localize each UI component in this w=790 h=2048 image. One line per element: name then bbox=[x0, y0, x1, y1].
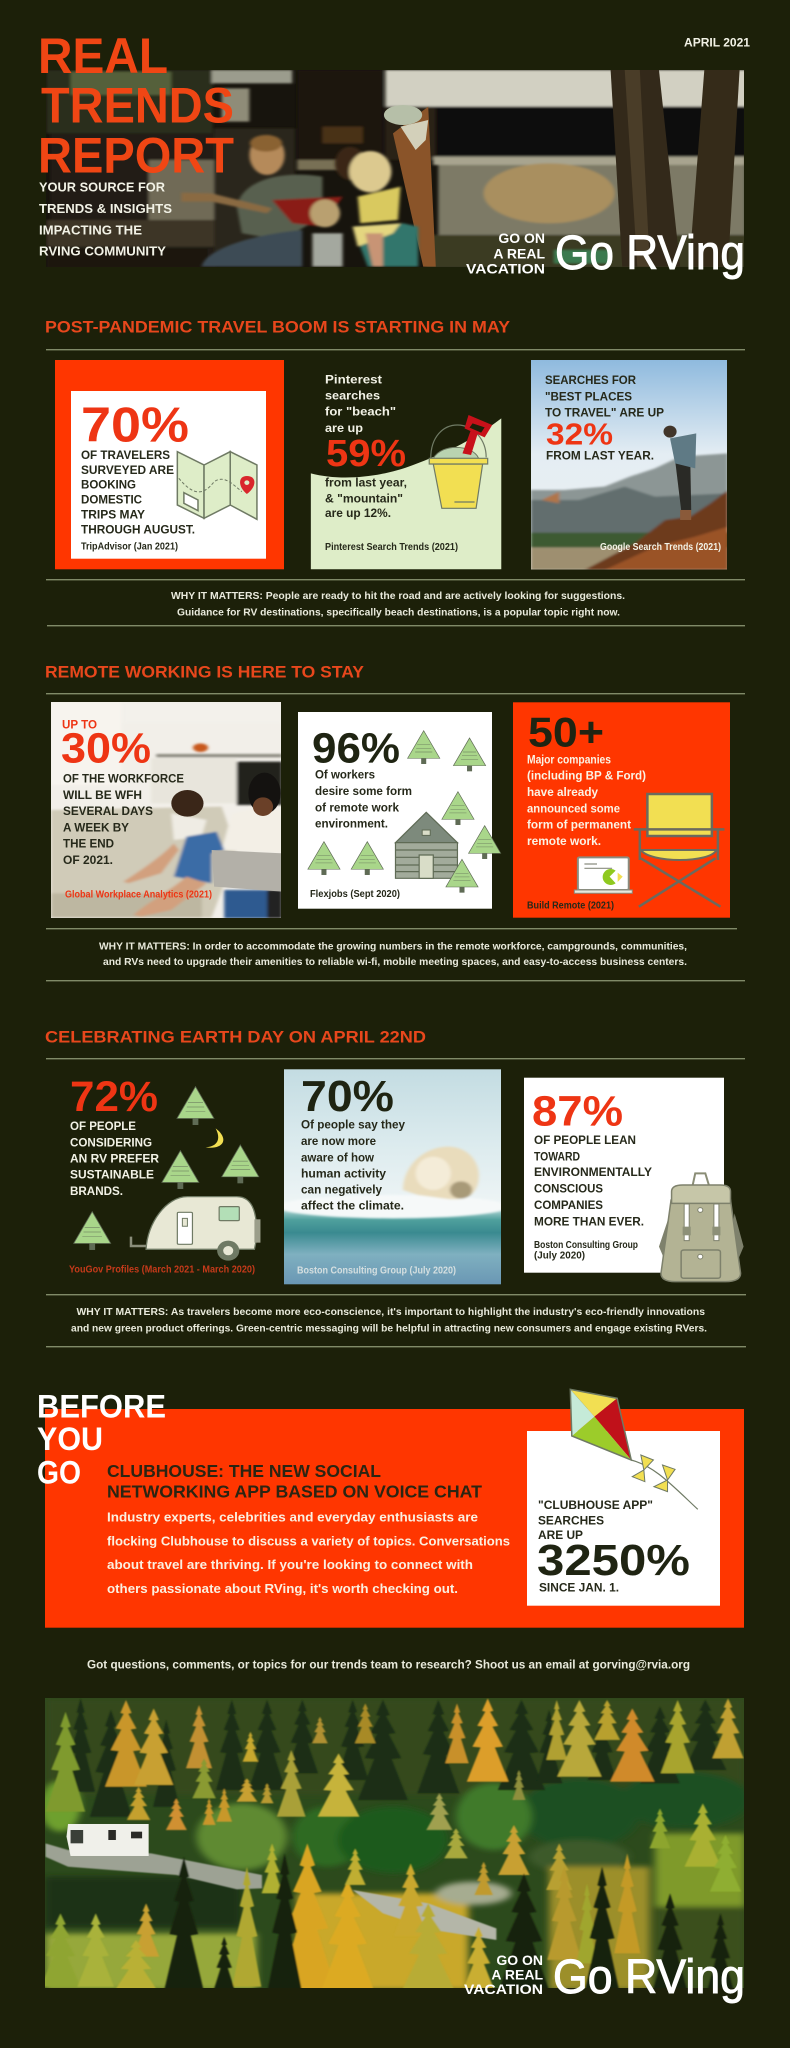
text: people lean toward: CONSCIOUS bbox=[534, 1182, 603, 1196]
text: Pinterest searches: are up bbox=[325, 421, 363, 435]
text: since jan 1: SINCE JAN. 1. bbox=[539, 1581, 619, 1595]
text: major companies: announced some bbox=[527, 801, 620, 815]
stat: 32%: 32% bbox=[546, 416, 613, 451]
text: people considering: SUSTAINABLE bbox=[70, 1168, 154, 1182]
why it matters: travel bbox=[171, 591, 625, 618]
photo: hiker on mountain bbox=[531, 426, 732, 570]
text: travelers surveyed: DOMESTIC bbox=[81, 493, 142, 507]
text: of workers: desire some form bbox=[315, 784, 412, 798]
text: best places: "BEST PLACES bbox=[545, 389, 632, 403]
text: Pinterest searches bbox=[325, 372, 396, 435]
stat: 96%: 96% bbox=[312, 724, 400, 772]
text: Pinterest searches: Pinterest bbox=[325, 372, 382, 386]
heading: before you go: YOU bbox=[37, 1421, 103, 1457]
text: best places: SEARCHES FOR bbox=[545, 373, 636, 387]
logo: Go RVing footer: GO ON bbox=[496, 1952, 543, 1968]
source: Boston Consulting Group: Boston Consulting Group (July 2020) bbox=[297, 1265, 456, 1276]
icon: trailer, trees and moon bbox=[74, 1087, 260, 1261]
stat: 59%: 59% bbox=[326, 433, 406, 475]
text: major companies: form of permanent bbox=[527, 818, 631, 832]
text: people considering: AN RV PREFER bbox=[70, 1152, 159, 1166]
text: clubhouse app searches: "CLUBHOUSE APP" bbox=[538, 1498, 653, 1512]
why it matters: travel: WHY IT MATTERS: People are ready to hit the road and are actively looking for suggestions. bbox=[171, 591, 625, 602]
icon: cabin and trees bbox=[308, 731, 501, 893]
title bbox=[38, 28, 234, 183]
source: YouGov: YouGov Profiles (March 2021 - March 2020) bbox=[69, 1265, 255, 1276]
text: people lean toward: MORE THAN EVER. bbox=[534, 1214, 644, 1228]
header photo: family at RV bbox=[46, 70, 748, 268]
text: from last year bbox=[325, 476, 407, 520]
text: people considering: CONSIDERING bbox=[70, 1135, 152, 1149]
text: people lean toward: ENVIRONMENTALLY bbox=[534, 1165, 652, 1179]
stat: 70%: 70% bbox=[301, 1072, 394, 1121]
photo: RV crossing bridge in autumn forest bbox=[40, 1698, 751, 1990]
why it matters: eco: WHY IT MATTERS: As travelers become more eco-conscience, it's important to highlight the industry's eco-friendly innovations bbox=[76, 1307, 705, 1318]
text: major companies: (including BP & Ford) bbox=[527, 769, 646, 783]
heading: clubhouse: CLUBHOUSE: THE NEW SOCIAL bbox=[107, 1461, 381, 1481]
heading: before you go: GO bbox=[37, 1454, 81, 1490]
panel: 96% workers bbox=[298, 712, 501, 909]
text: aware of human activity: human activity bbox=[301, 1166, 386, 1180]
text: aware of human activity: aware of how bbox=[301, 1150, 374, 1164]
text: clubhouse app searches bbox=[538, 1498, 653, 1542]
panel: Pinterest searches bbox=[311, 372, 501, 569]
why it matters: eco bbox=[71, 1307, 707, 1334]
text: major companies: remote work. bbox=[527, 834, 601, 848]
subtitle: IMPACTING THE bbox=[39, 223, 142, 237]
icon: map bbox=[177, 452, 257, 519]
text: travelers surveyed: BOOKING bbox=[81, 478, 136, 492]
source: Flexjobs: Flexjobs (Sept 2020) bbox=[310, 889, 400, 900]
logo: Go RVing header: A REAL bbox=[493, 245, 545, 261]
why it matters: travel: Guidance for RV destinations, specifically beach destinations, is a popular topic right now. bbox=[177, 607, 620, 618]
text: from last year: & "mountain" bbox=[325, 491, 403, 505]
text: clubhouse body bbox=[107, 1510, 510, 1596]
text: people considering bbox=[70, 1119, 159, 1198]
icon: kite bbox=[570, 1389, 698, 1509]
text: travelers surveyed: OF TRAVELERS bbox=[81, 448, 170, 462]
text: travelers surveyed: THROUGH AUGUST. bbox=[81, 522, 195, 536]
footer contact line: Got questions, comments, or topics for our trends team to research? Shoot us an email at gorving@rvia.org bbox=[87, 1659, 690, 1671]
source: Boston Consulting Group: Boston Consulting Group bbox=[534, 1240, 638, 1251]
source: TripAdvisor: TripAdvisor (Jan 2021) bbox=[81, 541, 178, 552]
text: of the workforce: OF THE WORKFORCE bbox=[63, 772, 184, 786]
title: REPORT bbox=[38, 127, 234, 183]
logo: Go RVing header: VACATION bbox=[466, 260, 545, 276]
subtitle: TRENDS & INSIGHTS bbox=[39, 202, 172, 216]
icon: camp chair and laptop bbox=[574, 794, 724, 907]
title: TRENDS bbox=[41, 78, 234, 134]
heading: clubhouse: NETWORKING APP BASED ON VOICE CHAT bbox=[107, 1482, 482, 1502]
text: of the workforce: OF 2021. bbox=[63, 853, 113, 867]
text: clubhouse body: flocking Clubhouse to discuss a variety of topics. Conversations bbox=[107, 1533, 510, 1548]
text: people lean toward bbox=[534, 1133, 652, 1228]
text: best places bbox=[545, 373, 664, 420]
logo: Go RVing footer bbox=[464, 1951, 745, 2004]
text: Pinterest searches: for "beach" bbox=[325, 404, 396, 418]
text: major companies: have already bbox=[527, 785, 598, 799]
text: Pinterest searches: searches bbox=[325, 388, 380, 402]
text: travelers surveyed bbox=[81, 448, 195, 536]
stat: 3250%: 3250% bbox=[537, 1536, 690, 1585]
source: Google: Google Search Trends (2021) bbox=[600, 542, 721, 553]
card: 3250% searches bbox=[527, 1431, 720, 1606]
title: REAL bbox=[38, 28, 168, 84]
panel: 30% work from home photo bbox=[51, 702, 282, 918]
text: travelers surveyed: TRIPS MAY bbox=[81, 507, 145, 521]
logo: Go RVing footer: A REAL bbox=[491, 1966, 543, 1982]
text: major companies: Major companies bbox=[527, 752, 611, 766]
text: people lean toward: OF PEOPLE LEAN bbox=[534, 1133, 636, 1147]
logo: Go RVing header bbox=[466, 227, 745, 280]
panel: 72% sustainable brands bbox=[69, 1073, 260, 1276]
text: of workers: environment. bbox=[315, 817, 388, 831]
text: from last year: FROM LAST YEAR. bbox=[546, 448, 654, 462]
stat: 30%: 30% bbox=[61, 724, 151, 772]
source: Pinterest: Pinterest Search Trends (2021) bbox=[325, 542, 458, 553]
text: travelers surveyed: SURVEYED ARE bbox=[81, 463, 174, 477]
text: of workers bbox=[315, 767, 412, 831]
text: clubhouse body: about travel are thriving. If you're looking to connect with bbox=[107, 1557, 473, 1572]
text: clubhouse app searches: ARE UP bbox=[538, 1528, 583, 1542]
text: people lean toward: COMPANIES bbox=[534, 1198, 603, 1212]
text: of the workforce: THE END bbox=[63, 837, 114, 851]
stat: 87%: 87% bbox=[532, 1088, 623, 1136]
section heading: earth day: CELEBRATING EARTH DAY ON APRIL 22ND bbox=[45, 1027, 426, 1046]
text: people considering: OF PEOPLE bbox=[70, 1119, 136, 1133]
text: of workers: Of workers bbox=[315, 767, 375, 781]
text: people considering: BRANDS. bbox=[70, 1184, 123, 1198]
text: best places: TO TRAVEL" ARE UP bbox=[545, 406, 664, 420]
text: of workers: of remote work bbox=[315, 800, 399, 814]
text: aware of human activity: are now more bbox=[301, 1134, 376, 1148]
photo: polar bear on ice bbox=[277, 1147, 509, 1218]
panel: polar bear 70% bbox=[277, 1069, 509, 1284]
subtitle: YOUR SOURCE FOR bbox=[39, 181, 165, 195]
text: people lean toward: TOWARD bbox=[534, 1149, 580, 1163]
text: from last year: from last year, bbox=[325, 476, 407, 490]
source: Global Workplace Analytics: Global Workplace Analytics (2021) bbox=[65, 889, 212, 900]
heading: clubhouse bbox=[107, 1461, 482, 1502]
why it matters: remote: and RVs need to upgrade their amenities to reliable wi-fi, mobile meeting spaces, and easy-to-access business centers. bbox=[103, 957, 687, 968]
stat: 72%: 72% bbox=[70, 1073, 158, 1121]
source: Boston Consulting Group: (July 2020) bbox=[534, 1251, 585, 1262]
why it matters: eco: and new green product offerings. Green-centric messaging will be helpful in attracting new consumers and engage existing RVers. bbox=[71, 1323, 707, 1334]
panel: 70% travelers bbox=[55, 360, 284, 569]
photo: father and child on sofa bbox=[51, 742, 281, 918]
text: aware of human activity: Of people say they bbox=[301, 1118, 405, 1132]
heading: before you go: BEFORE bbox=[37, 1389, 166, 1425]
why it matters: remote: WHY IT MATTERS: In order to accommodate the growing numbers in the remote workforce, campgrounds, communities, bbox=[99, 941, 687, 952]
source: Boston Consulting Group bbox=[534, 1240, 638, 1262]
why it matters: remote bbox=[99, 941, 687, 968]
text: clubhouse body: others passionate about RVing, it's worth checking out. bbox=[107, 1581, 458, 1596]
text: of the workforce: A WEEK BY bbox=[63, 821, 129, 835]
section heading: remote working: REMOTE WORKING IS HERE TO STAY bbox=[45, 662, 365, 681]
text: of the workforce bbox=[63, 772, 184, 867]
date: APRIL 2021 bbox=[684, 36, 750, 50]
panel: 87% eco companies bbox=[524, 1078, 744, 1282]
panel: 50+ companies bbox=[513, 702, 730, 918]
text: up to: UP TO bbox=[62, 718, 97, 732]
text: of the workforce: SEVERAL DAYS bbox=[63, 804, 153, 818]
text: aware of human activity bbox=[301, 1118, 405, 1212]
logo: Go RVing footer: VACATION bbox=[464, 1981, 543, 1997]
logo: Go RVing header: GO ON bbox=[498, 230, 545, 246]
subtitle bbox=[39, 181, 172, 259]
text: major companies bbox=[527, 752, 646, 848]
stat: 50+: 50+ bbox=[528, 709, 604, 756]
text: aware of human activity: can negatively bbox=[301, 1183, 382, 1197]
heading: before you go bbox=[37, 1389, 166, 1490]
logo: Go RVing footer: Go RVing bbox=[553, 1951, 745, 2004]
text: clubhouse app searches: SEARCHES bbox=[538, 1513, 604, 1527]
panel: Google searches photo bbox=[531, 360, 732, 570]
subtitle: RVING COMMUNITY bbox=[39, 245, 167, 259]
stat: 70%: 70% bbox=[81, 399, 189, 453]
text: from last year: are up 12%. bbox=[325, 506, 391, 520]
logo: Go RVing header: Go RVing bbox=[555, 227, 745, 280]
icon: backpack bbox=[659, 1173, 744, 1282]
panel: before you go bbox=[37, 1389, 744, 1628]
text: aware of human activity: affect the climate. bbox=[301, 1198, 404, 1212]
section heading: post-pandemic: POST-PANDEMIC TRAVEL BOOM IS STARTING IN MAY bbox=[45, 318, 511, 337]
icon: sand bucket and shovel bbox=[429, 415, 492, 508]
text: of the workforce: WILL BE WFH bbox=[63, 788, 142, 802]
source: Build Remote: Build Remote (2021) bbox=[527, 901, 614, 912]
text: clubhouse body: Industry experts, celebrities and everyday enthusiasts are bbox=[107, 1510, 478, 1525]
